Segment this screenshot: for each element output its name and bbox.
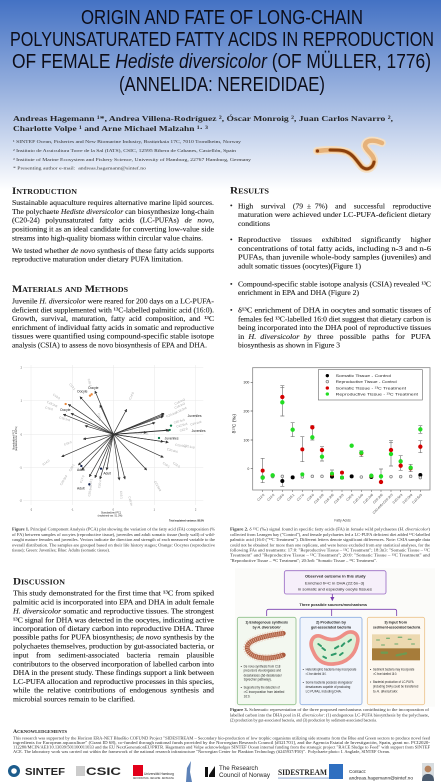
chart: delta 13C of fatty acids: 0: [247, 467, 249, 471]
panel: results: Results: [230, 186, 269, 196]
chart: delta 13C of fatty acids: C20:5n3: [392, 493, 403, 505]
panel: gut-associated bacteria: •: [303, 680, 305, 684]
chart: PCA biplot: C16:1: [119, 491, 124, 499]
acknowledgements: [13, 730, 431, 755]
chart: PCA biplot: C14:0: [128, 391, 135, 400]
chart: PCA biplot: C22:5n3: [176, 422, 188, 429]
figure 2 caption: following FAs and treatments: 17:0: "Reproductive Tissue – ¹³C Treatment"; 18:3n3: "Somatic Tissue – ¹³C: [230, 548, 430, 552]
chart: PCA biplot: 0: [21, 434, 23, 436]
panel: discussion: ¹³C signal for DHA was detected in the oocytes, indicating active: [13, 615, 214, 624]
chart: PCA biplot: 1: [154, 509, 156, 511]
panel: endogenous synthesis: Sprecher pathway).: [244, 678, 272, 682]
panel: discussion: incorporation of dietary carbon into reproductive DHA. Three: [13, 624, 214, 633]
panel: sediment-associated bacteria: ¹³C from labelled 16:0.: [373, 672, 397, 676]
panel: discussion: possible paths for PUFA biosynthesis; de novo synthesis by the: [13, 633, 214, 642]
acknowledgements: ingredients for European aquaculture" (Grant ID 68), co-funded through national funds provided by the Norwegian Research Council [#321701], and the Agencia Estatal de Investigación, Spain, grant no. PCI2020-: [13, 740, 431, 746]
panel: sediment-associated bacteria: Bacterial production of LC-PUFA: [373, 680, 414, 684]
panel: materials and methods: Growth, survival, maturation, fatty acid composition, and ¹³C: [12, 314, 214, 323]
chart: PCA biplot: C18:1n: [127, 496, 134, 507]
chart: PCA biplot: C20:3n3: [59, 474, 68, 486]
affiliations: ³ Institute of Marine Ecosystem and Fishery Science, University of Hamburg, 22767 Hamburg, Germany: [13, 157, 252, 163]
chart: PCA biplot: C22:0: [172, 461, 181, 469]
chart: PCA biplot: C18:0: [63, 440, 72, 447]
panel: gut-associated bacteria: Heterotrophic bacteria may incorporate: [306, 668, 356, 672]
panel: endogenous synthesis: •: [241, 685, 243, 689]
chart: PCA biplot: C15:0: [52, 393, 61, 401]
title: [10, 7, 434, 96]
chart: PCA biplot: C17:1: [68, 382, 77, 391]
panel: introduction: Introduction: [12, 187, 77, 197]
figure 3 caption: [230, 707, 430, 723]
chart: PCA biplot: C20:5: [97, 413, 102, 422]
panel: introduction: The polychaete Hediste diversicolor can biosynthesize long-chain: [12, 207, 214, 216]
panel: results: PUFAs, than juvenile whole-body samples (juveniles) and: [238, 253, 431, 262]
panel: results: enrichment in EPA and DHA (Figure 2): [238, 288, 360, 297]
figure 1 caption: tissue); Green: Juveniles; Blue: Adults (somatic tissue).: [12, 548, 110, 552]
panel: sediment-associated bacteria: (including DHA) could be transferred: [373, 685, 418, 689]
chart: PCA biplot: Oocyte: [60, 408, 71, 412]
chart: PCA biplot: (explained var. 24.2%): [15, 426, 18, 451]
contact: [349, 769, 413, 780]
figure 2 caption: palmitic acid (16:0 ("¹³C Treatment"). Different letters denote significant differences. Note: CSIA sample data: [230, 537, 430, 542]
panel: materials and methods: tissues were quantified using compound-specific stable isotope: [12, 332, 214, 341]
chart: PCA biplot: [12, 365, 206, 522]
panel: discussion: Discussion: [13, 578, 65, 588]
chart: PCA biplot: C20:2n6: [166, 411, 178, 418]
panel: endogenous synthesis: De novo synthesis from C18: [244, 664, 280, 668]
chart: delta 13C of fatty acids: Fatty Acids: [334, 518, 351, 522]
chart: PCA biplot: C20:4n3: [173, 418, 185, 425]
panel: endogenous synthesis: 16:0.: [244, 695, 250, 699]
figure 1 caption: caught mature females and juveniles. Vectors indicate the direction and strength of each measured variable to the: [12, 537, 215, 542]
chart: PCA biplot: 2: [195, 509, 197, 511]
panel: results: •: [230, 305, 233, 314]
panel: sediment-associated bacteria: Sediment bacteria may incorporate: [373, 668, 414, 672]
panel: materials and methods: deficient diet supplemented with ¹³C-labelled palmitic acid (16:0).: [12, 305, 214, 314]
panel: introduction: streams into high-quality biomass within circular value chains.: [12, 234, 203, 243]
chart: PCA biplot: -2: [30, 509, 33, 511]
icon: polychaete worm photo: [316, 141, 382, 169]
chart: PCA biplot: C14:0: [42, 458, 51, 466]
callout: observed outcome: [284, 571, 386, 594]
panel: gut-associated bacteria: Some bacteria possess elongases/: [306, 680, 352, 684]
panel: introduction: reproductive maturation under dietary PUFA limitation.: [12, 255, 183, 264]
panel: discussion: contributors to the observed incorporation of labelled carbon into: [13, 659, 214, 668]
chart: PCA biplot: C20:1n11: [136, 431, 149, 435]
panel: discussion: microbial sources remain to be clarified.: [13, 695, 135, 704]
panel: results: [230, 186, 432, 350]
panel: results: •: [230, 279, 233, 288]
chart: PCA biplot: Standardized PC1: [101, 512, 122, 515]
chart: PCA biplot: C18:2n6: [46, 400, 58, 408]
panel: results: •: [230, 235, 233, 244]
affiliations: * Presenting author e-mail: andreas.hagemann@sintef.no: [13, 166, 147, 170]
figure 2 caption: Treatment" and "Reproductive Tissue – ¹³C Treatment"; 20:0: "Somatic Tissue – ¹³C Treatment" and: [230, 552, 431, 558]
chart: PCA biplot: Juveniles: [188, 414, 202, 418]
chart: delta 13C of fatty acids: C12:0: [256, 493, 265, 502]
chart: PCA biplot: C18:3n3: [59, 415, 71, 422]
logo: SIDESTREAM: SIDESTREAM: [278, 767, 327, 777]
logo: The Research Council of Norway: Council of Norway: [219, 772, 271, 779]
chart: PCA biplot: Adult: [77, 486, 85, 490]
chart: delta 13C of fatty acids: C17:0: [296, 493, 305, 502]
chart: PCA biplot: 2: [21, 368, 23, 370]
panel: introduction: [12, 187, 214, 264]
chart: delta 13C of fatty acids: C18:0: [306, 493, 315, 502]
panel: sediment-associated bacteria: •: [370, 680, 372, 684]
panel: results: concentrations of total fatty acids, including n-3 and n-6: [238, 244, 431, 253]
heading: three mechanisms: Three possible sources/mechanisms: [299, 603, 367, 607]
panel: sediment-associated bacteria: to H. diversicolor.: [373, 689, 398, 693]
panel: gut-associated bacteria: desaturases capable of producing: [306, 685, 350, 689]
chart: PCA biplot: -2: [20, 501, 22, 503]
chart: PCA biplot: C16:0: [45, 405, 54, 411]
panel: endogenous synthesis: by H. diversicolor: [253, 626, 281, 630]
logo: Universität Hamburg: Universität Hamburg: [144, 772, 174, 776]
panel: gut-associated bacteria: 2) Production by: [316, 620, 346, 624]
panel: sediment-associated bacteria: sediment-associated bacteria: [373, 626, 420, 630]
panel: materials and methods: enrichment of individual fatty acids in somatic and reproductive: [12, 323, 214, 332]
chart: PCA biplot: Juveniles: [165, 437, 179, 441]
acknowledgements: Acknowledgements: [13, 730, 68, 735]
photo: presenting author: [422, 763, 434, 781]
chart: delta 13C of fatty acids: 200: [244, 409, 249, 413]
panel: discussion: [12, 578, 215, 704]
panel: results: δ¹³C enrichment of DHA in oocytes and somatic tissues of: [238, 305, 432, 314]
panel: results: Compound-specific stable isotope analysis (CSIA) revealed ¹³C: [238, 279, 431, 288]
panel: gut-associated bacteria: gut-associated bacteria: [311, 626, 351, 630]
chart: delta 13C of fatty acids: C18:1n9: [313, 493, 325, 505]
panel: results: maturation were achieved under LC-PUFA-deficient dietary: [238, 210, 431, 219]
logo: SINTEF: [8, 765, 65, 778]
panel: endogenous synthesis: precursors via elongases and: [244, 669, 281, 673]
legend: Reproductive Tissue - Control: [336, 380, 397, 384]
chart: delta 13C of fatty acids: C20:0: [345, 493, 354, 502]
logo: SINTEF: SINTEF: [25, 767, 65, 778]
panel: endogenous synthesis: Supported by the detection of: [244, 685, 280, 689]
panel: discussion: LC-PUFA allocation and reproductive processes in this species,: [13, 677, 214, 686]
panel: gut-associated bacteria: LC-PUFAs, including DHA.: [306, 690, 342, 694]
affiliations: ² Instituto de Acuicultura Torre de la Sal (IATS), CSIC, 12595 Ribera de Cabanes, Castellón, Spain: [13, 148, 237, 154]
panel: materials and methods: Materials and Methods: [12, 285, 128, 295]
chart: delta 13C of fatty acids: C18:3n3: [333, 493, 345, 505]
chart: PCA biplot: Adult: [77, 468, 85, 472]
chart: PCA biplot: Standardized PC2: [12, 429, 15, 450]
chart: PCA biplot: C22:6n3: [153, 480, 162, 492]
panel: gut-associated bacteria: [300, 617, 362, 705]
contact: andreas.hagemann@sintef.no: [349, 776, 413, 780]
figure 2 caption: Figure 2. δ ¹³C (‰) signal found in specific fatty acids (FA) in female wild polychaetes ( H. diversicolor ): [230, 526, 431, 532]
chart: PCA biplot: C18:3n3: [174, 401, 186, 410]
panel: endogenous synthesis: [237, 617, 296, 705]
panel: introduction: (C20-24) polyunsaturated fatty acids (LC-PUFAs) de novo,: [12, 216, 214, 225]
figure 3 caption: (2) production by gut-associated bacteria, and (3) production by sediment-associated bacteria.: [230, 717, 377, 723]
affiliations: ¹ SINTEF Ocean, Fisheries and New Biomarine Industry, Brattørkaia 17C, 7010 Trondheim, Norway: [13, 139, 242, 145]
panel: discussion: polychaetes themselves, production by gut-associated bacteria, or: [13, 642, 215, 651]
figure 3: schematic of mechanisms: [235, 568, 435, 707]
panel: results: females fed ¹³C-labelled 16:0 diet suggest that dietary carbon is: [238, 314, 431, 323]
chart: PCA biplot: Oocyte: [88, 386, 99, 390]
legend: Somatic Tissue - ¹³C Treatment: [336, 386, 406, 390]
figure 1 caption: [12, 526, 215, 552]
panel: endogenous synthesis: ¹³C incorporation from labelled: [244, 690, 284, 694]
panel: results: conditions: [238, 219, 270, 228]
figure 3 caption: Figure 3. Schematic representation of the three proposed mechanisms contributing to the incorporation of: [230, 707, 430, 712]
authors: Charlotte Volpe ¹ and Arne Michael Malzahn ¹· ³: [13, 124, 209, 133]
chart: PCA biplot: C20:4: [97, 480, 102, 489]
panel: results: •: [230, 201, 233, 210]
panel: endogenous synthesis: 1) Endogenous synthesis: [245, 620, 288, 624]
chart: PCA biplot: Juveniles: [192, 429, 206, 433]
panel: results: being incorporated into the DHA pool of reproductive tissues: [238, 323, 431, 332]
chart: PCA biplot: Adult: [103, 471, 111, 475]
chart: delta 13C of fatty acids: C20:4n6+C20:3n3: [372, 493, 394, 515]
panel: gut-associated bacteria: ¹³C from labelled 16:0.: [306, 672, 326, 676]
chart: PCA biplot: 1: [21, 401, 23, 403]
panel: materials and methods: Juvenile H. diversicolor were reared for 200 days on a LC-PUFA-: [12, 296, 215, 305]
chart: delta 13C of fatty acids: δ¹³C (‰): [232, 414, 238, 433]
arrow: outcome to mechanisms: [331, 594, 334, 600]
logo: institute emblem: [186, 761, 192, 782]
chart: delta 13C of fatty acids: [232, 368, 430, 522]
title: ORIGIN AND FATE OF LONG-CHAIN: [81, 7, 363, 29]
figure 1 caption: Figure 1. Principal Component Analysis (PCA) plot showing the variation of the fatty acid (FA) composition (%: [12, 526, 215, 532]
panel: endogenous synthesis: desaturases (Δ6-desaturase/: [244, 673, 282, 677]
chart: PCA biplot: C24:1n9: [190, 420, 202, 427]
panel: sediment-associated bacteria: 3) Input from: [384, 620, 407, 624]
legend: Somatic Tissue - Control: [336, 374, 391, 378]
panel: introduction: We tested whether de novo synthesis of these fatty acids supports: [12, 246, 214, 255]
chart: PCA biplot: C18:4n3: [174, 397, 186, 406]
panel: discussion: palmitic acid is incorporated into EPA and DHA in adult female: [13, 597, 214, 606]
title: (ANNELIDA: NEREIDIDAE): [119, 74, 325, 96]
acknowledgements: 112280/MCIN/AEI/10.13039/501100011033 and the EU NextGenerationEU/PRTR. Hagemann and Volpe acknowledges SINTEF Ocean internal funding from the strategic project "RACE Sludge to Feed" with support from SINTEF: [13, 744, 430, 749]
panel: materials and methods: analysis (CSIA) to assess de novo biosynthesis of EPA and DHA.: [12, 341, 207, 350]
chart: delta 13C of fatty acids: C18:3n6: [323, 493, 335, 505]
figure 2 caption: collected from Leangen bay ("Control"), and female polychaetes fed a LC-PUFA deficient diet added ¹³C-labelled: [230, 532, 431, 538]
chart: PCA biplot: Total explained variance: 88.8%: [169, 519, 205, 522]
panel: results: Reproductive tissues exhibited significantly higher: [238, 235, 432, 244]
callout: observed outcome: Observed outcome in this study: [305, 575, 366, 579]
chart: delta 13C of fatty acids: C20:3n6: [372, 493, 384, 505]
chart: PCA biplot: C16:1: [87, 378, 93, 387]
affiliations: [13, 139, 252, 170]
logo: The Research Council of Norway: The Research: [219, 765, 258, 772]
chart: delta 13C of fatty acids: C22:0n9: [402, 493, 413, 505]
panel: gut-associated bacteria: •: [303, 668, 305, 672]
chart: PCA biplot: (explained var. 51.3%): [98, 515, 123, 518]
figure 1 caption: overall distribution. The samples are grouped based on their life history stages; Orange: Oocytes (reproductive: [12, 542, 215, 547]
panel: sediment-associated bacteria: •: [370, 668, 372, 672]
chart: PCA biplot: C20:4n6: [166, 447, 179, 454]
chart: delta 13C of fatty acids: 100: [244, 438, 249, 442]
chart: delta 13C of fatty acids: C20:2n6: [362, 493, 374, 505]
logo: SIDESTREAM: [278, 764, 343, 779]
chart: delta 13C of fatty acids: 300: [244, 381, 249, 385]
chart: PCA biplot: C20:5n3: [175, 443, 187, 449]
logo: Universität Hamburg: DER FORSCHUNG · DER LEHRE · DER BILDUNG: [133, 777, 174, 780]
panel: introduction: positioning it as an ideal candidate for converting low-value side: [12, 225, 214, 234]
chart: PCA biplot: C22:0: [179, 427, 188, 433]
logo: CSIC: [76, 766, 121, 778]
chart: PCA biplot: -1: [71, 509, 74, 511]
panel: results: High survival (79 ± 7%) and successful reproductive: [238, 201, 431, 210]
panel: discussion: H. diversicolor somatic and reproductive tissues. The strongest: [12, 606, 214, 615]
acknowledgements: This research was supported by the Horizon ERA-NET BlueBio COFUND Project "SIDESTREAM – Secondary bio-production of low trophic organisms utilizing side streams from the Blue and Green sectors to produce novel feed: [13, 735, 431, 740]
panel: results: adult somatic tissues (oocytes)(Figure 1): [238, 262, 362, 271]
contact: Contact:: [349, 769, 366, 774]
chart: PCA biplot: C20:1: [68, 463, 76, 472]
logo: Universität Hamburg: [133, 765, 174, 780]
panel: materials and methods: [12, 285, 215, 350]
panel: endogenous synthesis: •: [241, 664, 243, 668]
authors: [13, 113, 393, 133]
acknowledgements: ACE. The laboratory work was carried out within the framework of the national research infrastructure "Norwegian Center for Plankton Technology (#245937/F50)". Polychaete photo: I. Anglade, SINTEF Ocean.: [13, 749, 390, 755]
chart: PCA biplot: C20:5n3: [87, 485, 93, 497]
figure 2 caption: could not be obtained for more than one replicate, and were hence excluded from any statistical analyses, for the: [230, 542, 430, 548]
chart: PCA biplot: C22:1n9: [183, 443, 195, 450]
chart: PCA biplot: C18:1: [162, 461, 171, 469]
callout: observed outcome: Enriched δ¹³C in DHA (22:6n−3): [305, 581, 364, 585]
chart: delta 13C of fatty acids: C16:1: [286, 493, 295, 502]
panel: discussion: input from sediment-associated bacteria remain plausible: [13, 651, 214, 660]
panel: sediment-associated bacteria: [367, 617, 425, 705]
chart: delta 13C of fatty acids: C14:0: [266, 493, 275, 502]
legend: Reproductive Tissue - ¹³C Treatment: [336, 392, 418, 396]
logo: CSIC: CSIC: [86, 766, 121, 778]
panel: results: biosynthesis as shown in Figure 3: [238, 341, 340, 350]
panel: discussion: while the relative contributions of endogenous synthesis and: [13, 686, 214, 695]
logo: The Research Council of Norway: [205, 765, 271, 779]
panel: discussion: DHA in the present study. These findings support a link between: [13, 668, 214, 677]
chart: PCA biplot: 0: [113, 509, 115, 511]
figure 2 caption: "Reproductive Tissue – ¹³C Treatment"; 20:3n6: "Somatic Tissue – ¹³C Treatment".: [230, 558, 377, 563]
arrow: branching connector: [267, 609, 397, 616]
legend: [318, 370, 422, 400]
chart: PCA biplot: C17:0: [79, 475, 85, 484]
callout: observed outcome: in somatic and especially oocyte tissues: [298, 587, 372, 591]
panel: introduction: Sustainable aquaculture requires alternative marine lipid sources.: [12, 198, 214, 207]
panel: results: in H. diversicolor by three possible paths for PUFA: [238, 332, 432, 341]
chart: PCA biplot: C18:3n6: [175, 406, 188, 414]
chart: PCA biplot: C18:1: [88, 478, 93, 487]
chart: PCA biplot: Oocyte: [77, 389, 88, 393]
authors: Andreas Hagemann ¹*, Andrea Villena-Rodríguez ², Óscar Monroig ², Juan Carlos Navarro ²,: [13, 113, 393, 123]
figure 3 caption: labelled carbon into the DHA pool in H. diversicolor: (1) endogenous LC-PUFA biosynthesis by the polychaete,: [230, 712, 429, 718]
chart: delta 13C of fatty acids: C16:0: [276, 493, 285, 502]
figure 1 caption: of FA) between samples of oocytes (reproductive tissue), juveniles and adult somatic tissue (body wall) of wild-: [12, 532, 215, 538]
chart: delta 13C of fatty acids: C22:6n3: [411, 493, 423, 505]
chart: PCA biplot: -1: [20, 467, 22, 469]
chart: delta 13C of fatty acids: C20:1n9: [352, 493, 364, 505]
panel: discussion: This study demonstrated for the first time that ¹³C from spiked: [13, 588, 214, 597]
figure 2 caption: [230, 526, 431, 563]
